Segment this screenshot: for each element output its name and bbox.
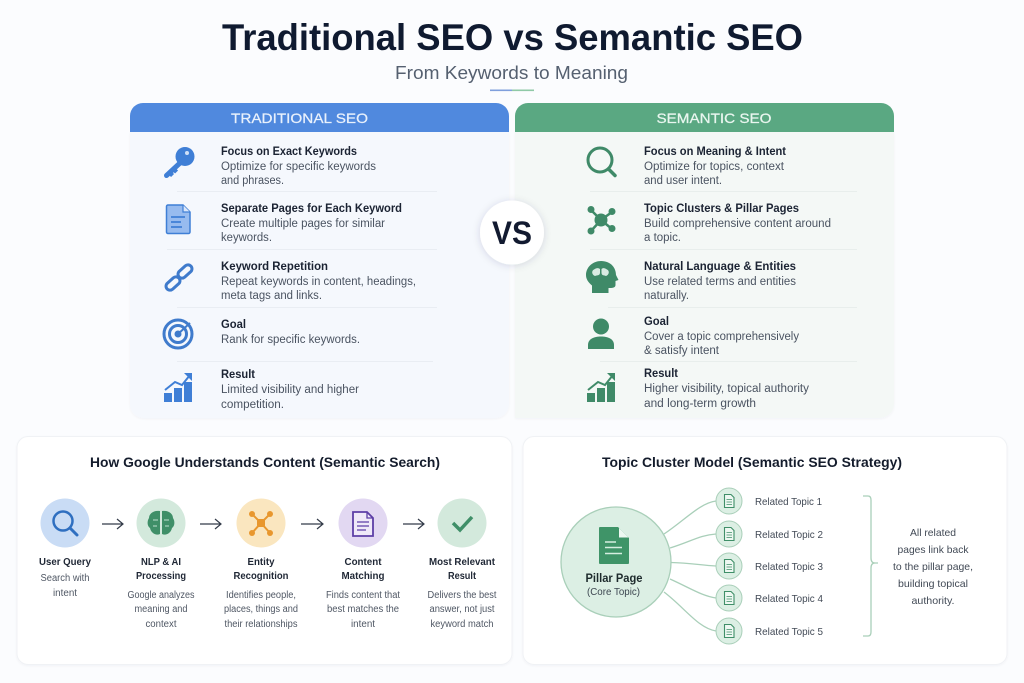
panel: traditional SEO — [130, 103, 509, 418]
row: result — [644, 368, 809, 410]
icon: chain link — [164, 263, 194, 292]
step: most relevant result: keyword match — [430, 619, 494, 630]
pillar page node: Pillar Page — [586, 571, 643, 585]
row: result: Higher visibility, topical authority — [644, 383, 809, 395]
step: NLP and AI processing: NLP & AI — [141, 556, 181, 568]
row: result: and long-term growth — [644, 398, 756, 410]
row: goal — [644, 316, 799, 357]
row: natural language: Use related terms and entities — [644, 276, 796, 288]
step: user query: Search with — [40, 573, 90, 584]
icon: growth chart — [164, 373, 192, 402]
step: most relevant result: Most Relevant — [429, 556, 495, 568]
row: goal: & satisfy intent — [644, 345, 720, 357]
row: topic clusters — [644, 203, 831, 244]
note text: to the pillar page, — [893, 561, 973, 573]
step: most relevant result: Result — [448, 570, 476, 582]
step: content matching — [326, 498, 400, 630]
related topic 3: Related Topic 3 — [755, 561, 823, 573]
row: result: Result — [221, 369, 255, 381]
step: entity recognition — [224, 498, 298, 630]
step: most relevant result: Delivers the best — [428, 590, 497, 601]
arrow — [403, 519, 424, 529]
related topic 2: Related Topic 2 — [755, 529, 823, 541]
step: NLP and AI processing: Google analyzes — [128, 590, 194, 601]
connector lines — [664, 501, 716, 631]
step: content matching: Content — [344, 556, 382, 568]
step: user query: intent — [53, 588, 77, 599]
pillar page node — [561, 507, 671, 617]
step: most relevant result — [428, 498, 497, 630]
row: meaning and intent: Focus on Meaning & Intent — [644, 146, 786, 158]
panel: semantic SEO — [515, 103, 894, 418]
panel: how Google understands content — [17, 436, 512, 664]
icon: growth chart — [587, 373, 615, 402]
row: exact keywords: Focus on Exact Keywords — [221, 146, 357, 158]
row: topic clusters: Build comprehensive content around — [644, 218, 831, 230]
row: result — [221, 369, 359, 411]
panel: topic cluster model — [523, 436, 1007, 664]
row: goal — [221, 319, 360, 346]
arrow — [301, 519, 323, 529]
step: entity recognition: their relationships — [224, 619, 298, 630]
icon: document — [166, 205, 190, 234]
step: content matching: Finds content that — [326, 590, 400, 601]
row: result: Result — [644, 368, 678, 380]
row: keyword repetition: meta tags and links. — [221, 290, 322, 302]
traditional header — [130, 103, 509, 132]
row: meaning and intent: and user intent. — [644, 175, 722, 187]
row: goal: Goal — [221, 319, 246, 331]
row: exact keywords — [221, 146, 376, 187]
row: topic clusters: a topic. — [644, 232, 681, 244]
step: content matching: best matches the — [327, 604, 399, 615]
step: entity recognition: Identifies people, — [226, 590, 296, 601]
row: natural language: Natural Language & Entities — [644, 261, 796, 273]
row: exact keywords: Optimize for specific keywords — [221, 161, 376, 173]
related topic 1: Related Topic 1 — [755, 496, 822, 508]
icon: head with brain — [586, 261, 618, 293]
step: user query — [39, 498, 91, 599]
step: entity recognition: Recognition — [234, 570, 288, 582]
semantic header: SEMANTIC SEO — [656, 110, 772, 126]
step: most relevant result: answer, not just — [430, 604, 495, 615]
note text: pages link back — [898, 544, 969, 556]
arrow — [102, 519, 123, 529]
related topic 3 — [716, 553, 823, 579]
note text: authority. — [912, 595, 954, 607]
heading: Topic Cluster Model (Semantic SEO Strategy) — [602, 454, 902, 470]
row: keyword repetition: Repeat keywords in content, headings, — [221, 276, 416, 288]
icon: cluster — [588, 206, 616, 234]
step: NLP and AI processing: context — [146, 619, 177, 630]
row: meaning and intent: Optimize for topics, context — [644, 161, 785, 173]
VS badge — [480, 200, 544, 264]
arrow — [200, 519, 221, 529]
step: user query: User Query — [39, 556, 91, 568]
step: entity recognition: Entity — [248, 556, 275, 568]
related topic 1 — [716, 488, 822, 514]
row: separate pages: keywords. — [221, 232, 272, 244]
VS badge: VS — [492, 215, 532, 251]
traditional header: TRADITIONAL SEO — [231, 110, 368, 126]
related topic 2 — [716, 521, 823, 547]
related topic 5: Related Topic 5 — [755, 626, 823, 638]
note text: All related — [910, 527, 956, 539]
row: separate pages: Create multiple pages for similar — [221, 218, 385, 230]
row: result: Limited visibility and higher — [221, 384, 359, 396]
row: keyword repetition: Keyword Repetition — [221, 261, 328, 273]
semantic header — [515, 103, 894, 132]
row: meaning and intent — [644, 146, 786, 187]
row: goal: Cover a topic comprehensively — [644, 331, 799, 343]
step: NLP and AI processing — [128, 498, 194, 630]
row: topic clusters: Topic Clusters & Pillar Pages — [644, 203, 799, 215]
step: NLP and AI processing: meaning and — [134, 604, 188, 615]
step: entity recognition: places, things and — [224, 604, 298, 615]
icon: target — [164, 320, 192, 348]
pillar page node: (Core Topic) — [587, 586, 640, 598]
note text: building topical — [898, 578, 968, 590]
title: Traditional SEO vs Semantic SEO — [222, 17, 803, 58]
heading: How Google Understands Content (Semantic Search) — [90, 454, 440, 470]
title underline accent — [490, 90, 534, 91]
subtitle: From Keywords to Meaning — [395, 63, 628, 83]
related topic 4: Related Topic 4 — [755, 593, 823, 605]
icon: magnifier — [588, 148, 615, 176]
row: natural language: naturally. — [644, 290, 689, 302]
row: goal: Rank for specific keywords. — [221, 334, 360, 346]
row: separate pages: Separate Pages for Each Keyword — [221, 203, 402, 215]
note text — [893, 527, 973, 607]
step: NLP and AI processing: Processing — [136, 570, 186, 582]
row: exact keywords: and phrases. — [221, 175, 284, 187]
brace — [863, 496, 878, 636]
step: content matching: intent — [351, 619, 375, 630]
icon: person — [588, 318, 614, 349]
row: keyword repetition — [221, 261, 416, 302]
related topic 4 — [716, 585, 823, 611]
row: goal: Goal — [644, 316, 669, 328]
row: separate pages — [221, 203, 402, 244]
related topic 5 — [716, 618, 823, 644]
row: natural language — [644, 261, 796, 302]
step: content matching: Matching — [342, 570, 384, 582]
icon: key — [166, 147, 194, 176]
row: result: competition. — [221, 399, 284, 411]
